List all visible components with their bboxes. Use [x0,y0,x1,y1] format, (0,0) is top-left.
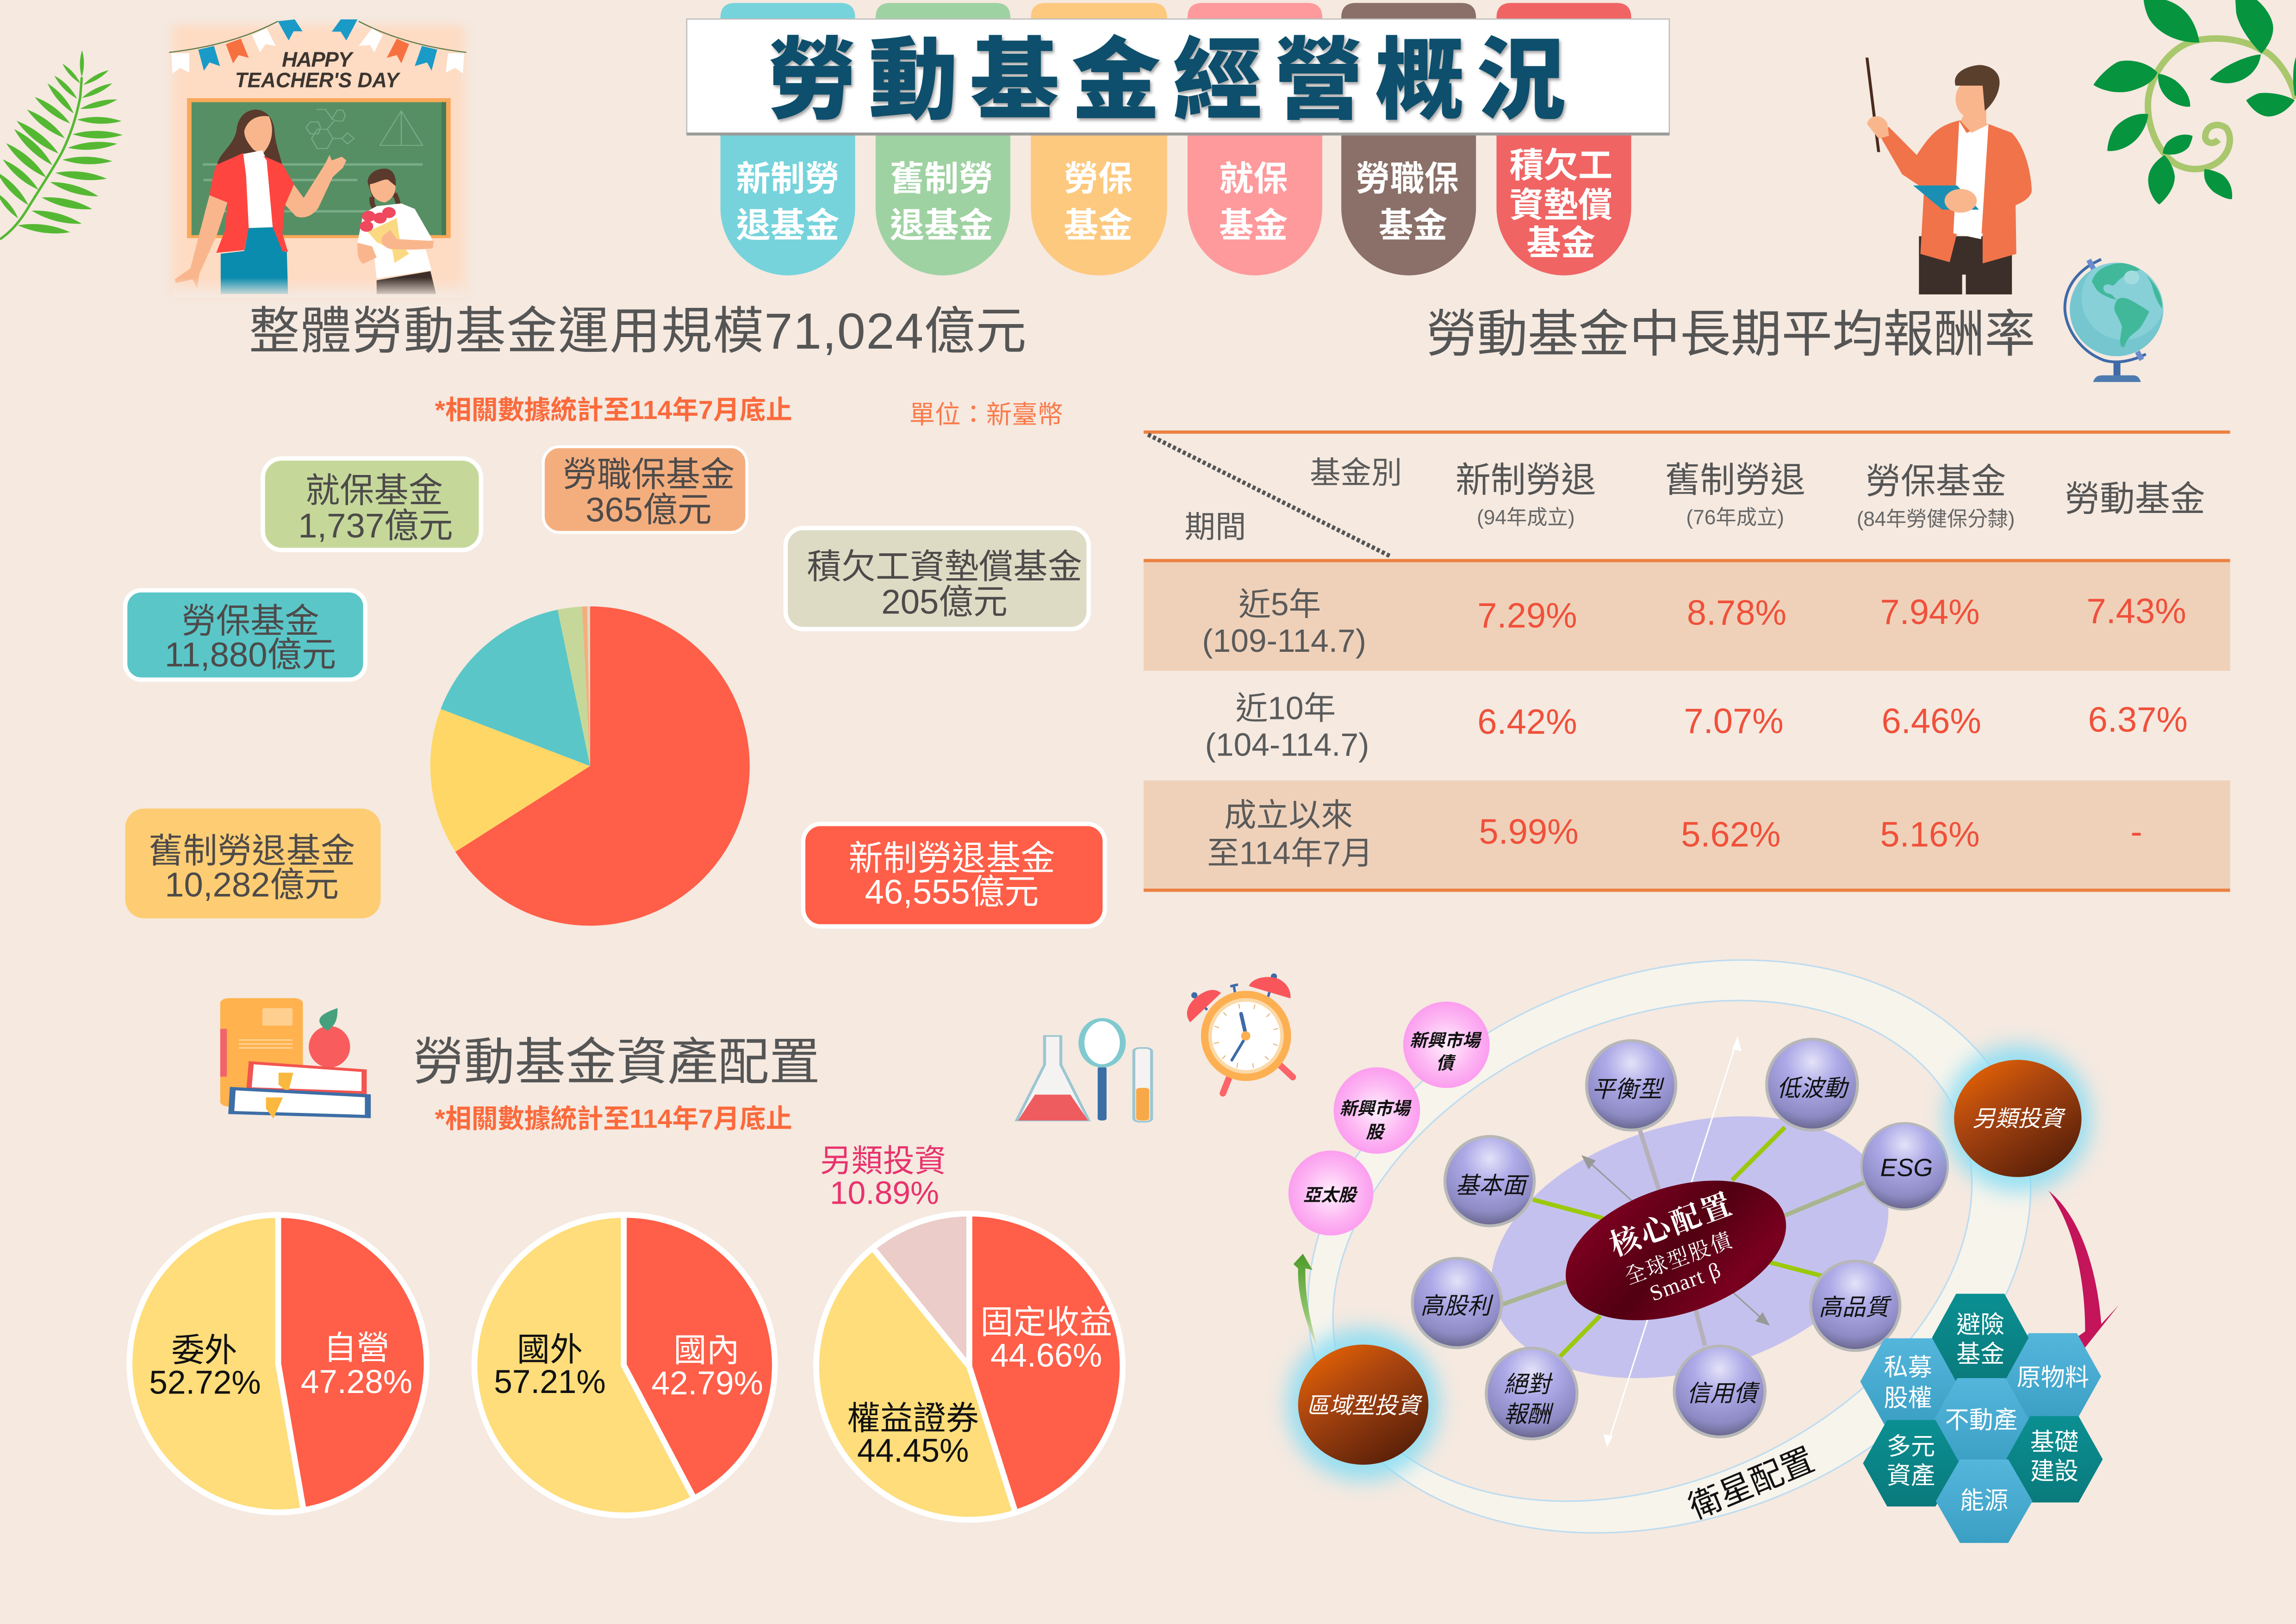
tab: new labor pension fund: 退基金 [736,206,840,245]
note: data date: *相關數據統計至114年7月底止 [435,395,792,425]
table: returns: 8.78% [1687,593,1786,632]
pie chart: self-managed vs outsourced: 52.72% [149,1364,261,1401]
hexagon: energy [1936,1460,2032,1543]
table: returns: 期間 [1185,510,1246,544]
hexagon: energy: 能源 [1960,1487,2008,1514]
sphere: high quality [1811,1261,1900,1350]
hexagon: real estate [1933,1378,2030,1465]
table: returns: 6.37% [2088,700,2188,739]
pie chart: asset classes: 44.66% [990,1337,1102,1374]
tab: wage arrears fund [1497,3,1631,275]
sphere: low volatility: 低波動 [1777,1075,1850,1101]
pie chart: domestic vs overseas: 國外 [517,1331,583,1368]
hexagon: multi-asset: 資產 [1887,1462,1935,1489]
sphere: alternative investment [1945,1045,2091,1192]
label: old pension fund [125,808,381,918]
sphere: absolute return [1486,1348,1577,1439]
tab: new labor pension fund [721,3,855,275]
table: returns: (109-114.7) [1202,623,1366,659]
hexagon: commodities: 原物料 [2017,1364,2089,1391]
table: returns: (104-114.7) [1205,727,1369,763]
icon: flask, magnifier and test tube [1016,1020,1151,1122]
tab: old labor pension fund: 退基金 [890,206,993,245]
pie chart: asset classes: 固定收益 [980,1305,1112,1341]
hexagon: multi-asset [1863,1420,1960,1506]
label: labor insurance fund: 11,880億元 [165,636,336,674]
tab: employment insurance fund: 基金 [1219,206,1288,245]
sphere: absolute return: 報酬 [1504,1401,1554,1427]
sphere: emerging market equity [1334,1068,1420,1154]
label: employment insurance fund: 1,737億元 [298,506,453,545]
text: satellite allocation: 衛星配置 [1684,1442,1819,1526]
note: data date: *相關數據統計至114年7月底止 [435,1104,792,1134]
table: returns: 5.62% [1681,815,1780,855]
icon: books and apple [220,998,368,1118]
table: returns: - [2130,812,2142,851]
label: employment insurance fund [263,458,481,550]
pie chart: domestic vs overseas: 國內 [673,1332,740,1369]
hexagon: infrastructure: 建設 [2030,1458,2078,1485]
hexagon: infrastructure [2006,1416,2103,1503]
sphere: ESG: ESG [1880,1154,1933,1182]
table: returns: 舊制勞退 [1665,461,1805,500]
connectors [1497,1127,1866,1359]
hexagon: real estate: 不動產 [1945,1407,2017,1434]
label: alternative investment: 另類投資 [820,1143,946,1179]
tab: labor insurance fund [1031,3,1167,275]
tab: wage arrears fund: 基金 [1526,224,1595,262]
pie chart: asset classes: 44.45% [857,1433,969,1469]
table: returns: 6.46% [1882,702,1981,741]
label: wage arrears fund: 205億元 [881,583,1008,621]
label: occupational accident fund [543,447,747,532]
note: unit: 單位：新臺幣 [909,400,1063,429]
sphere: balanced: 平衡型 [1592,1076,1664,1102]
tab: occupational accident insurance fund: 勞職保 [1356,159,1459,198]
table: returns: (84年勞健保分隸) [1857,508,2015,531]
hexagon: private equity: 股權 [1884,1385,1932,1412]
sphere: high dividend [1412,1258,1502,1348]
sphere: balanced [1587,1041,1676,1130]
label: new pension fund: 新制勞退基金 [849,839,1055,877]
tab: labor insurance fund: 勞保 [1064,159,1132,198]
sphere: emerging market debt: 新興市場 [1410,1031,1482,1051]
table: returns: 7.94% [1880,593,1980,632]
table: returns: 勞保基金 [1866,462,2006,501]
table: returns: 成立以來 [1224,797,1353,833]
label: wage arrears fund: 積欠工資墊償基金 [807,548,1082,586]
table: returns: 至114年7月 [1207,835,1373,871]
table: returns: 基金別 [1310,456,1402,490]
diagram: satellite ring [1226,862,2113,1624]
sphere: regional investment [1287,1329,1439,1481]
illustration: teacher and student [169,19,467,298]
sphere: low volatility [1767,1039,1857,1130]
tab: employment insurance fund: 就保 [1219,159,1288,198]
pie chart: asset classes [816,1213,1123,1520]
tab: labor insurance fund: 基金 [1064,206,1132,245]
pie chart: self-managed vs outsourced [130,1215,427,1512]
pie chart: self-managed vs outsourced: 委外 [171,1332,237,1369]
sphere: asia pacific equity [1288,1150,1373,1236]
text: happy teacher's day: HAPPY [282,47,354,71]
heading: fund size: 整體勞動基金運用規模71,024億元 [249,303,1027,360]
pie chart: fund size [430,606,750,926]
sphere: emerging market equity: 股 [1366,1123,1385,1142]
sphere: fundamental: 基本面 [1456,1172,1529,1199]
label: occupational accident fund: 勞職保基金 [563,455,734,493]
pie chart: domestic vs overseas: 42.79% [651,1365,763,1402]
label: new pension fund [803,824,1105,926]
diagram: core ellipse [1460,1073,1919,1422]
table: returns: (94年成立) [1477,506,1575,529]
sphere: absolute return: 絕對 [1504,1371,1553,1397]
sphere: credit bonds [1674,1346,1765,1437]
tab: wage arrears fund: 積欠工 [1509,146,1612,185]
pie chart: domestic vs overseas [474,1215,775,1515]
icon: globe [2065,256,2165,382]
sphere: asia pacific equity: 亞太股 [1303,1186,1358,1205]
label: occupational accident fund: 365億元 [585,490,712,529]
label: alternative investment: 10.89% [830,1175,939,1211]
text: happy teacher's day [235,47,401,92]
label: labor insurance fund [125,590,365,680]
pie chart: asset classes: 權益證券 [847,1400,979,1437]
sphere: credit bonds: 信用債 [1687,1380,1760,1406]
icon: fern leaf [0,50,123,239]
tab: occupational accident insurance fund [1341,3,1476,275]
label: alternative investment [820,1143,946,1211]
heading: asset allocation: 勞動基金資產配置 [413,1034,820,1091]
sphere: emerging market debt [1403,1001,1490,1088]
title banner: 勞動基金經營概況 [767,30,1578,130]
hexagon: hedge funds: 避險 [1956,1312,2004,1338]
tab: occupational accident insurance fund: 基金 [1379,206,1448,245]
arrows: white and grey axis [1583,1038,1768,1445]
core ellipse label: 核心配置 [1605,1187,1738,1263]
label: old pension fund: 10,282億元 [165,865,339,904]
table: returns: 近10年 [1236,690,1336,726]
sphere: ESG [1861,1123,1948,1210]
hexagon: infrastructure: 基礎 [2030,1429,2078,1455]
tab: wage arrears fund: 資墊償 [1509,186,1612,224]
arrow: green [1294,1254,1319,1352]
tab: new labor pension fund: 新制勞 [736,159,840,198]
table: returns: 5.99% [1479,812,1579,851]
sphere: emerging market debt: 債 [1436,1054,1456,1074]
hexagon: multi-asset: 多元 [1887,1433,1935,1460]
core ellipse label: 全球型股債 [1622,1228,1736,1289]
hexagon: commodities [2004,1333,2101,1419]
hexagon: hedge funds: 基金 [1956,1341,2004,1368]
label: wage arrears fund [785,528,1089,629]
label: old pension fund: 舊制勞退基金 [149,832,355,870]
table: returns: 5.16% [1880,815,1980,855]
label: labor insurance fund: 勞保基金 [181,602,319,640]
tab: employment insurance fund [1188,3,1322,275]
core ellipse label [1548,1155,1804,1346]
illustration: presenter with pointer [1867,57,2032,294]
tab: old labor pension fund [876,3,1010,275]
sphere: high quality: 高品質 [1819,1294,1892,1320]
pie chart: self-managed vs outsourced: 自營 [324,1330,390,1367]
icon: climbing vine [2093,0,2296,205]
tab: old labor pension fund: 舊制勞 [890,159,993,198]
heading: returns: 勞動基金中長期平均報酬率 [1426,306,2035,362]
table: returns: 近5年 [1238,586,1321,622]
sphere: high dividend: 高股利 [1420,1293,1493,1319]
label: employment insurance fund: 就保基金 [305,471,443,510]
sphere: alternative investment: 另類投資 [1972,1106,2066,1131]
hexagon: private equity: 私募 [1884,1354,1932,1381]
core ellipse label: Smart β [1647,1258,1724,1306]
table: returns [1144,432,2230,890]
pie chart: self-managed vs outsourced: 47.28% [301,1364,412,1400]
hexagon: hedge funds [1932,1294,2028,1382]
table: returns: 6.42% [1477,702,1577,742]
table: returns: 新制勞退 [1456,461,1596,500]
arrow: magenta [2048,1191,2119,1348]
hexagon: private equity [1860,1338,1957,1425]
pie chart: domestic vs overseas: 57.21% [494,1364,606,1400]
table: returns: (76年成立) [1686,506,1784,529]
text: happy teacher's day: TEACHER'S DAY [235,68,401,92]
label: new pension fund: 46,555億元 [865,873,1039,911]
sphere: regional investment: 區域型投資 [1307,1393,1423,1418]
table: returns: 7.43% [2086,592,2186,631]
sphere: emerging market equity: 新興市場 [1339,1099,1412,1119]
table: returns: 7.07% [1684,702,1784,741]
table: returns: 7.29% [1477,596,1577,636]
table: returns: 勞動基金 [2065,480,2205,519]
icon: alarm clock [1187,974,1293,1093]
sphere: fundamental [1445,1137,1534,1226]
